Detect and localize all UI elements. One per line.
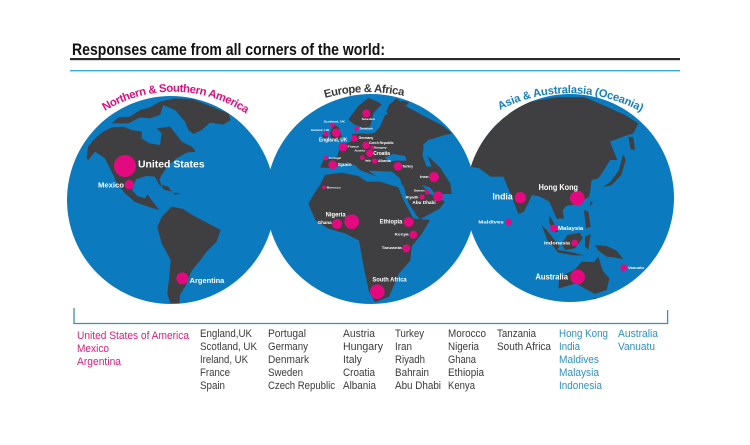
sea: Black Sea and Caspian — [365, 102, 432, 214]
list: Middle East: Iran — [395, 341, 412, 353]
list: Africa column 1: Ethiopia — [448, 367, 485, 379]
list: Oceania: Vanuatu — [618, 341, 655, 353]
land: North America — [87, 127, 196, 210]
list: Americas — [77, 330, 190, 368]
list: Oceania — [618, 328, 659, 353]
markers and labels: Europe and Africa: Spain — [338, 162, 352, 168]
list: Europe column 2 — [268, 328, 335, 392]
heading: Europe and Africa: Europe & Africa — [324, 84, 404, 98]
list: Europe column 2: Czech Republic — [268, 380, 335, 392]
globe: Asia and Australasia — [466, 94, 674, 303]
list: Africa column 2: Tanzania — [497, 328, 537, 340]
list: Asia: Indonesia — [559, 380, 603, 392]
list: Asia: Malaysia — [559, 367, 600, 379]
list: Asia: Maldives — [559, 354, 599, 366]
markers and labels: Europe and Africa: France — [348, 144, 359, 148]
markers and labels: Europe and Africa: Albania — [378, 159, 391, 163]
list: Asia: India — [559, 341, 581, 353]
title: Responses came from all corners of the world: — [72, 41, 385, 59]
markers and labels: Europe and Africa: Denmark — [360, 127, 373, 131]
land: Arctic islands and Greenland — [112, 98, 231, 134]
heading: Asia and Australasia: Asia & Australasia (Oceania) — [499, 85, 643, 113]
markers and labels: Europe and Africa: Sweden — [362, 117, 375, 121]
list: Americas: Mexico — [77, 343, 109, 355]
markers and labels: Europe and Africa: Ireland, UK — [311, 128, 330, 132]
land: Japan and Sakhalin — [603, 137, 635, 187]
markers and labels: Europe and Africa: Germany — [359, 136, 373, 140]
land: South America — [157, 207, 221, 303]
markers and labels: Europe and Africa: Riyadh — [406, 195, 418, 199]
land: Scandinavia — [348, 98, 383, 127]
land: northern island — [401, 101, 409, 105]
land: British Isles — [322, 124, 342, 141]
markers and labels: Europe and Africa: Scotland, UK — [324, 119, 346, 123]
markers and labels: Europe and Africa: Hungary — [374, 145, 387, 149]
land: Philippines and Taiwan — [584, 201, 593, 228]
markers and labels: Asia and Australasia — [478, 183, 644, 284]
list: Africa column 2 — [497, 328, 552, 353]
list: Europe column 1: France — [200, 367, 230, 379]
markers and labels: Europe and Africa: Ghana — [318, 220, 332, 225]
markers and labels: Asia and Australasia: Hong Kong — [539, 183, 578, 192]
title underline — [70, 58, 680, 60]
markers and labels: Asia and Australasia: Malaysia — [558, 226, 583, 232]
list: Middle East: Riyadh — [395, 354, 425, 366]
list: Middle East: Bahrain — [395, 367, 429, 379]
bracket — [74, 308, 668, 324]
markers and labels: Europe and Africa: Portugal — [329, 156, 341, 160]
land: Australia — [558, 257, 609, 303]
list: Europe column 2: Germany — [268, 341, 308, 353]
list: Europe column 1 — [200, 328, 258, 392]
list: Europe column 3: Albania — [343, 380, 377, 392]
markers and labels: Americas: United States — [138, 159, 205, 170]
markers and labels: Americas: Argentina — [190, 278, 224, 285]
list: Africa column 1: Ghana — [448, 354, 477, 366]
markers and labels: Europe and Africa: Italy — [365, 158, 371, 162]
list: Europe column 1: England,UK — [200, 328, 253, 340]
globe: Americas — [67, 96, 275, 304]
markers and labels: Europe and Africa: Tanzania — [382, 245, 403, 250]
list: Middle East — [395, 328, 441, 392]
list: Europe column 3: Austria — [343, 328, 376, 340]
list: Europe column 1: Scotland, UK — [200, 341, 258, 353]
markers and labels: Europe and Africa: Morocco — [327, 185, 341, 189]
markers and labels: Europe and Africa: Iran — [420, 174, 429, 179]
list: Europe column 1: Spain — [200, 380, 225, 392]
land: Africa — [308, 173, 430, 302]
markers and labels: Europe and Africa: Croatia — [373, 151, 390, 157]
land: Italy and Greece — [360, 150, 385, 170]
markers and labels: Asia and Australasia: Australia — [535, 273, 569, 282]
list: Europe column 2: Sweden — [268, 367, 303, 379]
land: Eurasia — [320, 98, 452, 219]
list: Europe column 3: Croatia — [343, 367, 376, 379]
heading: Northern and Southern America: Northern & Southern America — [102, 84, 248, 114]
list: Europe column 3 — [343, 328, 383, 392]
list: Europe column 1: Ireland, UK — [200, 354, 249, 366]
markers and labels: Asia and Australasia: India — [492, 192, 514, 202]
markers and labels: Europe and Africa: Czech Republic — [369, 141, 394, 145]
list: Asia: Hong Kong — [559, 328, 608, 340]
markers and labels: Europe and Africa: Nigeria — [326, 213, 346, 219]
land: Malay peninsula and Sumatra — [542, 215, 559, 250]
list: Oceania: Australia — [618, 328, 659, 340]
list: Europe column 2: Portugal — [268, 328, 306, 340]
markers and labels: Europe and Africa: Turkey — [402, 164, 413, 168]
markers and labels: Europe and Africa: Bahrain — [414, 188, 425, 192]
list: Africa column 1: Nigeria — [448, 341, 480, 353]
markers and labels: Americas — [98, 155, 224, 285]
markers and labels: Europe and Africa: Ethiopia — [380, 219, 403, 225]
markers and labels: Asia and Australasia: Indonesia — [544, 240, 570, 246]
globe: Europe and Africa — [266, 94, 476, 304]
list: Middle East: Turkey — [395, 328, 424, 340]
list: Europe column 2: Denmark — [268, 354, 309, 366]
list: Americas: United States of America — [77, 330, 190, 342]
list: Europe column 3: Hungary — [343, 341, 383, 353]
land: Asia — [467, 97, 638, 219]
markers and labels: Europe and Africa: Kenya — [395, 232, 410, 237]
list: Africa column 1 — [448, 328, 486, 392]
list: Americas: Argentina — [77, 356, 122, 368]
list: Africa column 1: Morocco — [448, 328, 486, 340]
markers and labels: Europe and Africa: Abu Dhabi — [412, 200, 436, 205]
list: Middle East: Abu Dhabi — [395, 380, 441, 392]
blue rule — [70, 70, 680, 71]
markers and labels: Europe and Africa: England, UK — [319, 137, 347, 143]
list: Europe column 3: Italy — [343, 354, 362, 366]
markers and labels: Europe and Africa: South Africa — [372, 278, 407, 284]
list: Asia — [559, 328, 608, 392]
land: New Guinea — [595, 245, 623, 259]
land: Borneo, Java and Sulawesi — [555, 233, 591, 255]
markers and labels: Europe and Africa — [311, 109, 443, 299]
markers and labels: Asia and Australasia: Vanuatu — [628, 266, 644, 270]
list: Africa column 2: South Africa — [497, 341, 552, 353]
markers and labels: Americas: Mexico — [98, 182, 124, 189]
markers and labels: Europe and Africa: Austria — [354, 148, 365, 152]
markers and labels: Asia and Australasia: Maldives — [478, 219, 504, 225]
list: Africa column 1: Kenya — [448, 380, 476, 392]
